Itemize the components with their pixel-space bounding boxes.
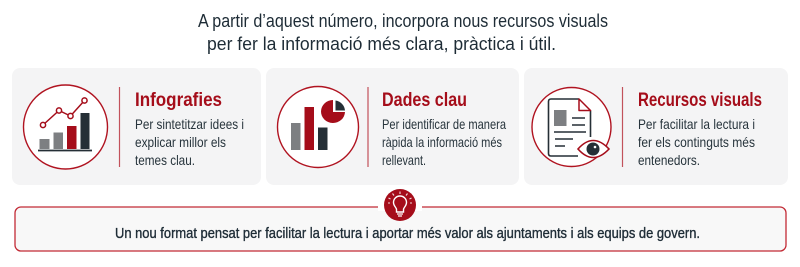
panel text: Recursos visuals: fer els continguts més [638, 135, 755, 150]
heading: A partir d’aquest número, incorpora nous recursos visuals [198, 11, 608, 31]
panel title: Dades clau: Dades clau [382, 89, 467, 111]
heading: per fer la informació més clara, pràctica i útil. [207, 34, 556, 54]
icon: document with eye [532, 88, 611, 166]
panel: Recursos visuals [524, 68, 788, 185]
panel text: Recursos visuals [638, 117, 755, 168]
panel: Dades clau [266, 68, 519, 185]
icon: bar chart with trend line [24, 85, 108, 169]
icon: bars and pie chart [278, 86, 358, 168]
panel text: Dades clau [382, 117, 506, 168]
icon: light bulb [384, 189, 416, 221]
panel text: Recursos visuals: Per facilitar la lectura i [638, 117, 755, 132]
panel text: Infografies [135, 117, 244, 168]
callout text: Un nou format pensat per facilitar la lectura i aportar més valor als ajuntaments i als equips de govern. [115, 226, 700, 242]
panel text: Recursos visuals: entenedors. [638, 153, 700, 168]
panel title: Infografies: Infografies [135, 89, 222, 111]
panel text: Infografies: temes clau. [135, 153, 195, 168]
callout [15, 189, 786, 251]
panel text: Dades clau: ràpida la informació més [382, 135, 502, 150]
panel text: Infografies: explicar millor els [135, 135, 226, 150]
heading [198, 11, 608, 54]
panel text: Dades clau: rellevant. [382, 153, 426, 168]
panel text: Infografies: Per sintetitzar idees i [135, 117, 244, 132]
panel title: Recursos visuals: Recursos visuals [638, 89, 762, 111]
panel: Infografies [12, 68, 261, 185]
panel text: Dades clau: Per identificar de manera [382, 117, 506, 132]
